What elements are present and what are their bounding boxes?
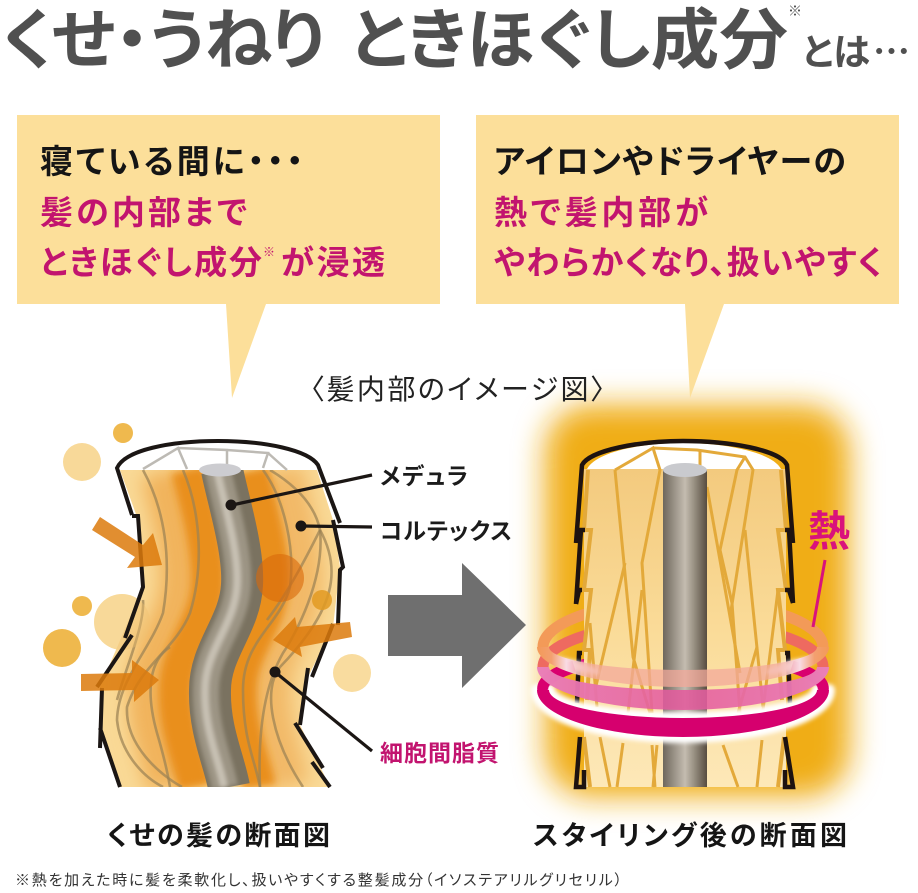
caption: frizzy hair: くせの髪の断面図 [107, 821, 330, 851]
arrow: before to after [388, 563, 526, 688]
bubble text: penetrates to hair interior [40, 194, 385, 281]
label: heat: 熱 [808, 508, 850, 555]
ring 3 magenta [537, 690, 829, 737]
label: medulla: メデュラ [380, 463, 468, 489]
ring 3 side caps [543, 666, 823, 691]
heat glow [545, 405, 850, 797]
hair body [584, 469, 786, 787]
cortex fibres [584, 448, 786, 787]
title: ときほぐし成分 [350, 3, 788, 77]
medulla top [199, 464, 241, 476]
ring 3 white halo [537, 690, 829, 737]
label: cortex: コルテックス [380, 518, 512, 544]
panel: heat speech bubble [476, 115, 899, 398]
gray fibre frame on top [143, 448, 287, 470]
ring 2 pink [537, 667, 829, 710]
bubble text: while sleeping: 寝ている間に・・・ [40, 143, 303, 180]
heat rings back [543, 601, 823, 690]
bubble text: softens with heat [494, 194, 882, 281]
label leader: medulla [226, 475, 372, 510]
cortex blot [256, 554, 304, 602]
title: とは [802, 32, 870, 73]
bubble text: penetrates to hair interior: ときほぐし成分 [40, 244, 262, 281]
label leader: cortex [296, 520, 372, 532]
bubble text: softens with heat: やわらかくなり、扱いやすく [494, 244, 882, 281]
label leader: intercellular lipid [270, 666, 372, 751]
diagram subtitle: 〈髪内部のイメージ図〉 [310, 374, 605, 405]
label: intercellular lipid: 細胞間脂質 [380, 740, 499, 766]
hair body [100, 470, 340, 787]
caption: styled hair: スタイリング後の断面図 [533, 820, 847, 851]
ring 1 peach [537, 647, 829, 687]
medulla core [205, 470, 242, 787]
cuticle outline [576, 441, 793, 787]
footnote: ※熱を加えた時に髪を柔軟化し、扱いやすくする整髪成分（イソステアリルグリセリル） [15, 872, 622, 889]
bubble text: penetrates to hair interior: ※ [263, 245, 275, 259]
bubble text: penetrates to hair interior: が浸透 [281, 244, 385, 281]
top face [587, 443, 781, 469]
title: ※ [788, 3, 802, 19]
cortex fibres [117, 470, 332, 787]
illustration: styled hair cross-section [537, 441, 829, 787]
title [2, 3, 910, 77]
title: … [873, 22, 910, 76]
medulla rod [663, 470, 707, 787]
pressure arrows [81, 517, 352, 702]
ring side highlights [549, 654, 601, 678]
bubble text: softens with heat: 熱で髪内部が [494, 194, 708, 231]
panel: sleeping speech bubble [17, 115, 440, 398]
bubble text: penetrates to hair interior: 髪の内部まで [40, 194, 247, 231]
cuticle outline [97, 441, 343, 787]
leader: heat [813, 560, 825, 627]
title: くせ・うねり [2, 3, 325, 77]
bubble text: iron or dryer: アイロンやドライヤーの [494, 143, 846, 180]
illustration: frizzy hair cross-section [43, 423, 371, 790]
heat rings front [537, 647, 829, 737]
bubbles: outside droplets [43, 423, 371, 692]
